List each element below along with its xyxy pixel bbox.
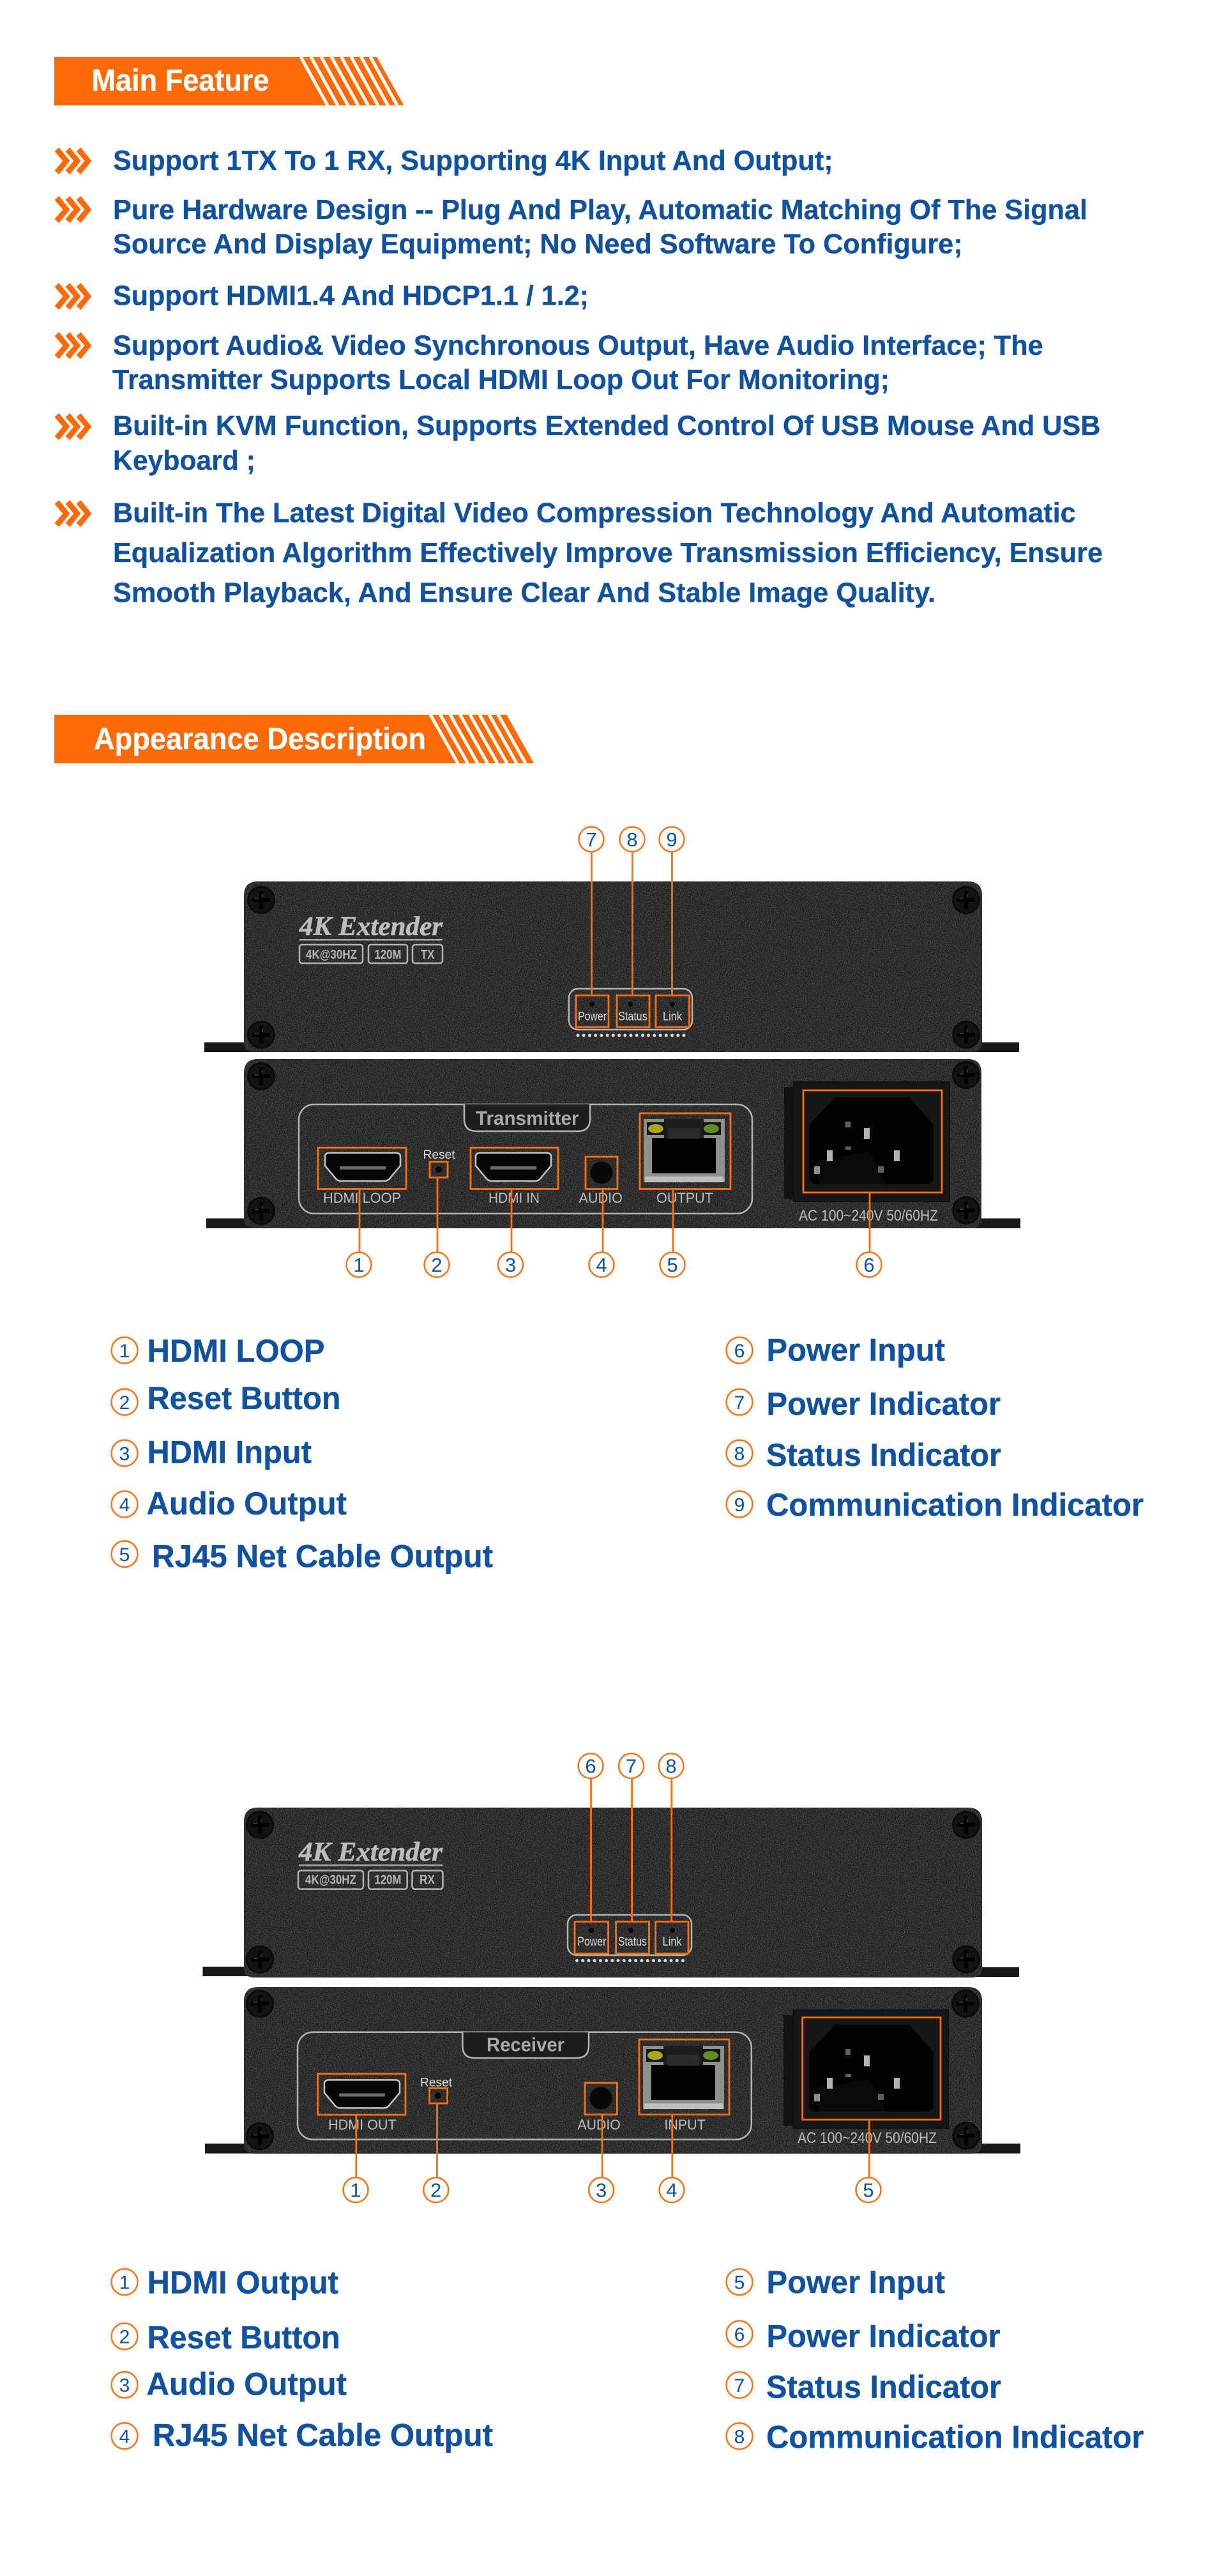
item 8: Status Indicator	[766, 1437, 1001, 1473]
port: HDMI LOOP: HDMI LOOP	[323, 1190, 401, 1206]
marker 5: 5	[667, 1254, 678, 1276]
item 6: 6	[734, 1341, 745, 1362]
item 4: 4	[119, 2427, 130, 2448]
badges: 4K@30HZ 120M RX: 4K@30HZ	[305, 1873, 356, 1887]
bullet 3: Support HDMI1.4 And HDCP1.1 / 1.2;	[113, 280, 589, 312]
port: HDMI IN	[471, 1148, 558, 1206]
connector panel with Receiver tab	[298, 2032, 752, 2140]
item 9: 9	[734, 1495, 745, 1516]
item 7: 7	[734, 2375, 745, 2397]
port: HDMI IN: HDMI IN	[488, 1190, 540, 1206]
item 1: HDMI Output	[147, 2265, 338, 2301]
item 5: 5	[734, 2273, 745, 2294]
marker 1: 1	[353, 1254, 365, 1276]
marker 4	[659, 2115, 685, 2202]
port: power socket	[783, 2010, 948, 2147]
marker 3: 3	[596, 2179, 607, 2202]
marker 2	[424, 1178, 450, 1277]
item 1: 1	[119, 1341, 130, 1362]
item 7: Power Indicator	[766, 1386, 1001, 1422]
callouts: transmitter numbered markers	[346, 827, 881, 1277]
bullet 2: Source And Display Equipment; No Need Software To Configure;	[113, 229, 963, 259]
marker 5	[660, 1189, 685, 1277]
receiver legend: left column	[111, 2265, 493, 2453]
marker 2: 2	[431, 1254, 443, 1276]
marker 2	[423, 2103, 448, 2202]
item 2: 2	[119, 1392, 130, 1414]
item 6: 6	[734, 2324, 745, 2345]
logo: 4K Extender: 4K Extender	[299, 912, 443, 941]
item 8: 8	[734, 2427, 745, 2448]
heading banner: Appearance Description	[54, 715, 534, 763]
transmitter legend: left column	[111, 1333, 493, 1574]
marker 8: 8	[626, 828, 638, 851]
marker 4: 4	[596, 1254, 607, 1276]
device: transmitter rear panel	[206, 1059, 1020, 1228]
marker 7	[579, 827, 604, 995]
marker 9	[659, 827, 685, 995]
logo: 4K Extender: 4K Extender	[298, 1838, 443, 1867]
item 3: 3	[119, 2375, 130, 2397]
item 4: 4	[119, 1495, 130, 1516]
marker 6	[579, 1753, 603, 1921]
marker 8	[659, 1753, 683, 1921]
transmitter legend: right column	[727, 1332, 1144, 1523]
bullet 6: Equalization Algorithm Effectively Improve Transmission Efficiency, Ensure	[113, 537, 1103, 568]
marker 5: 5	[863, 2179, 874, 2202]
marker 3	[589, 2115, 614, 2202]
port: AUDIO: AUDIO	[579, 1190, 623, 1206]
port: RJ45 INPUT: INPUT	[664, 2117, 706, 2133]
badges: 4K@30HZ 120M RX: 120M	[374, 1873, 401, 1887]
port: HDMI LOOP	[318, 1148, 406, 1206]
badges: 4K@30HZ 120M TX	[299, 945, 443, 963]
marker 4: 4	[666, 2179, 677, 2202]
item 4: RJ45 Net Cable Output	[153, 2417, 493, 2453]
item 7: 7	[734, 1392, 745, 1414]
connector panel with Transmitter tab	[299, 1104, 752, 1214]
item 8: 8	[734, 1444, 745, 1465]
marker 9: 9	[666, 828, 677, 851]
marker 2: 2	[430, 2179, 441, 2202]
bullet 4: Transmitter Supports Local HDMI Loop Out For Monitoring;	[112, 364, 889, 395]
bullet 6: Built-in The Latest Digital Video Compression Technology And Automatic	[113, 497, 1076, 529]
item 5: Power Input	[766, 2264, 945, 2300]
bullet 5: Built-in KVM Function, Supports Extended Control Of USB Mouse And USB	[113, 410, 1101, 441]
port: power socket	[784, 1082, 950, 1224]
device: receiver rear panel	[205, 1987, 1020, 2154]
item 1: 1	[119, 2273, 130, 2294]
port: power socket: AC 100~240V 50/60HZ	[799, 1207, 938, 1224]
callouts: receiver numbered markers	[344, 1753, 881, 2202]
indicator panel: Status	[618, 1010, 647, 1024]
badges: 4K@30HZ 120M TX: 120M	[374, 948, 401, 962]
item 2: Reset Button	[147, 1380, 341, 1416]
marker 3	[498, 1189, 523, 1277]
item 5: 5	[119, 1544, 130, 1566]
indicator panel	[569, 989, 692, 1035]
item 3: HDMI Input	[147, 1434, 312, 1470]
port: Reset: Reset	[420, 2076, 453, 2090]
bullet 2	[55, 194, 1087, 259]
bullet 4: Support Audio& Video Synchronous Output, Have Audio Interface; The	[113, 330, 1043, 362]
port: AUDIO: AUDIO	[577, 2117, 621, 2133]
marker 1	[344, 2115, 368, 2202]
marker 1: 1	[350, 2179, 361, 2202]
bullet 1: Support 1TX To 1 RX, Supporting 4K Input And Output;	[113, 145, 833, 176]
bullet 5: Keyboard ;	[113, 445, 255, 476]
connector panel with Transmitter tab: Transmitter	[476, 1107, 579, 1129]
heading banner: Main Feature	[54, 57, 404, 105]
marker 1	[346, 1189, 372, 1277]
indicator panel: Link	[663, 1010, 682, 1024]
feature list	[55, 145, 1103, 608]
port: RJ45 OUTPUT: OUTPUT	[656, 1190, 713, 1206]
item 6: Power Input	[766, 1332, 945, 1368]
item 2: Reset Button	[147, 2320, 340, 2356]
port: Reset	[420, 2076, 453, 2103]
item 3: Audio Output	[147, 2366, 347, 2402]
marker 6: 6	[585, 1755, 596, 1778]
item 9: Communication Indicator	[766, 1487, 1144, 1523]
port: HDMI OUT	[318, 2074, 405, 2133]
item 8: Communication Indicator	[766, 2420, 1144, 2455]
item 1: HDMI LOOP	[147, 1333, 324, 1369]
connector panel with Receiver tab: Receiver	[487, 2033, 564, 2055]
transmitter diagram	[204, 827, 1020, 1277]
badges: 4K@30HZ 120M TX: TX	[421, 948, 435, 962]
indicator panel	[568, 1915, 692, 1961]
receiver legend: right column	[727, 2264, 1144, 2455]
indicator panel: Power	[578, 1010, 607, 1024]
port: Reset	[423, 1148, 455, 1178]
indicator panel: Power	[577, 1935, 607, 1949]
item 6: Power Indicator	[766, 2318, 1000, 2354]
port: AUDIO	[579, 1157, 623, 1206]
marker 5	[856, 2119, 881, 2202]
bullet 5	[55, 410, 1101, 476]
marker 4	[589, 1189, 614, 1277]
marker 8	[619, 827, 645, 995]
marker 6	[857, 1193, 881, 1277]
bullet 6	[55, 497, 1103, 608]
badges: 4K@30HZ 120M TX: 4K@30HZ	[306, 948, 357, 962]
item 5: RJ45 Net Cable Output	[152, 1539, 493, 1574]
heading banner: Appearance Description: Appearance Description	[94, 722, 426, 756]
marker 3: 3	[505, 1254, 516, 1276]
indicator panel: Status	[618, 1935, 647, 1949]
port: power socket: AC 100~240V 50/60HZ	[798, 2130, 937, 2147]
port: Reset: Reset	[423, 1148, 455, 1162]
marker 8: 8	[665, 1755, 677, 1778]
bullet 2: Pure Hardware Design -- Plug And Play, Automatic Matching Of The Signal	[113, 194, 1087, 225]
receiver diagram	[203, 1753, 1020, 2202]
item 4: Audio Output	[147, 1486, 347, 1521]
indicator panel: Link	[663, 1935, 682, 1949]
marker 6: 6	[863, 1254, 875, 1276]
heading banner: Main Feature: Main Feature	[92, 64, 269, 98]
port: AUDIO	[577, 2083, 621, 2133]
badges: 4K@30HZ 120M RX	[298, 1871, 443, 1889]
marker 7: 7	[586, 828, 597, 851]
item 3: 3	[119, 1444, 130, 1465]
bullet 6: Smooth Playback, And Ensure Clear And Stable Image Quality.	[113, 577, 935, 608]
badges: 4K@30HZ 120M RX: RX	[420, 1873, 435, 1887]
marker 7: 7	[626, 1755, 637, 1778]
marker 7	[619, 1753, 644, 1921]
item 7: Status Indicator	[766, 2369, 1001, 2405]
port: HDMI OUT: HDMI OUT	[328, 2117, 397, 2133]
device: transmitter front panel	[204, 881, 1019, 1052]
port: RJ45 OUTPUT	[640, 1113, 730, 1206]
item 2: 2	[119, 2327, 130, 2348]
port: RJ45 INPUT	[639, 2039, 729, 2133]
bullet 4	[55, 330, 1043, 395]
device: receiver front panel	[203, 1808, 1019, 1978]
